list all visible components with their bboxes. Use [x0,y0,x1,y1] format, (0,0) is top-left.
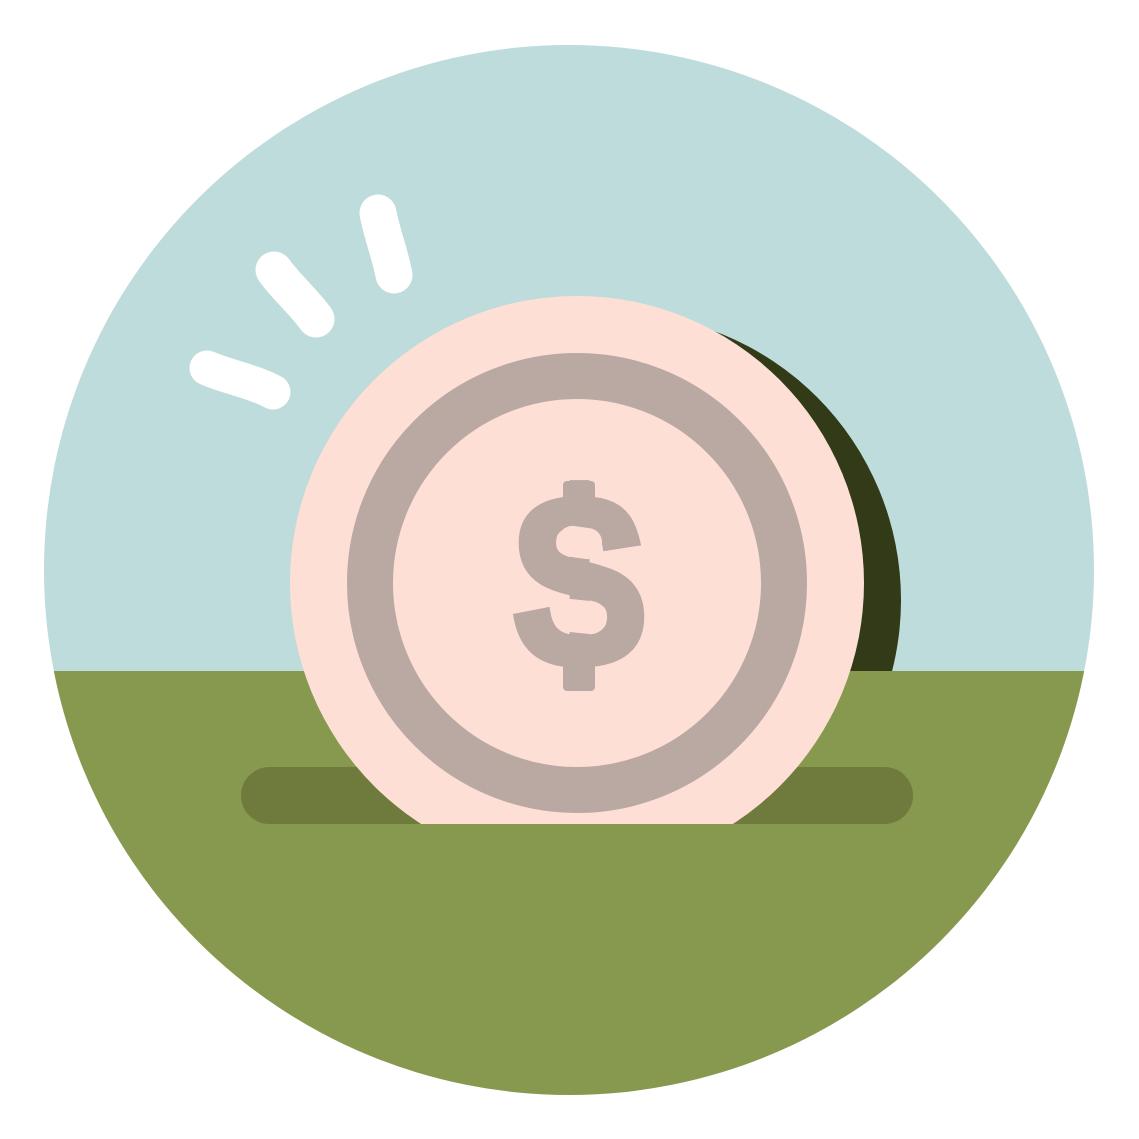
sparkle: left [207,368,273,392]
sparkle lines [207,213,394,392]
sparkle: right [378,213,394,275]
slot [241,767,913,824]
coin ring [370,376,784,790]
coin shadow [714,330,901,671]
icon: dollar sign: $ [514,445,644,718]
sparkle: middle [274,270,316,319]
coin [290,296,864,870]
